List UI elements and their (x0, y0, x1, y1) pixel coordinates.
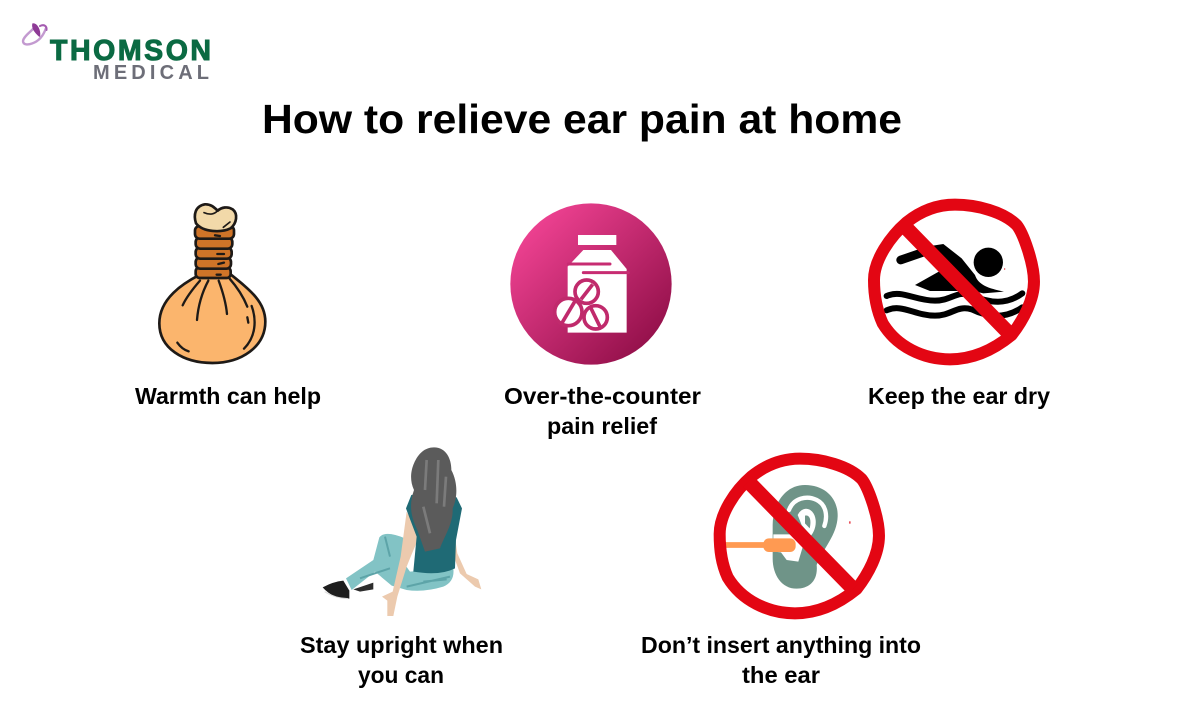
label: Stay upright when (300, 632, 503, 658)
icon: medicine bottle and pills (510, 203, 672, 365)
panel: keep the ear dry (868, 205, 1050, 409)
label: Keep the ear dry (868, 383, 1050, 409)
title: How to relieve ear pain at home (262, 96, 902, 142)
label (300, 632, 503, 688)
panel: don't insert anything into the ear (641, 459, 921, 688)
panel: stay upright when you can (300, 447, 503, 688)
logo: Thomson Medical: MEDICAL (93, 62, 209, 84)
icon: butterfly heart (23, 24, 47, 44)
icon: herbal compress bundle (159, 204, 265, 363)
label: Over-the-counter (504, 383, 701, 409)
label: you can (358, 662, 444, 688)
logo: Thomson Medical: THOMSON (50, 35, 211, 67)
label: Warmth can help (135, 383, 321, 409)
icon: no swimming (874, 205, 1034, 359)
logo: Thomson Medical (23, 24, 211, 84)
icon: seated woman from behind (323, 447, 481, 616)
label: Don’t insert anything into (641, 632, 921, 658)
label: pain relief (547, 413, 657, 439)
label (641, 632, 921, 688)
label (504, 383, 701, 439)
label: the ear (742, 662, 820, 688)
panel: warmth can help (135, 204, 321, 409)
icon: no cotton swab in ear (720, 459, 879, 613)
panel: over-the-counter pain relief (504, 203, 701, 439)
